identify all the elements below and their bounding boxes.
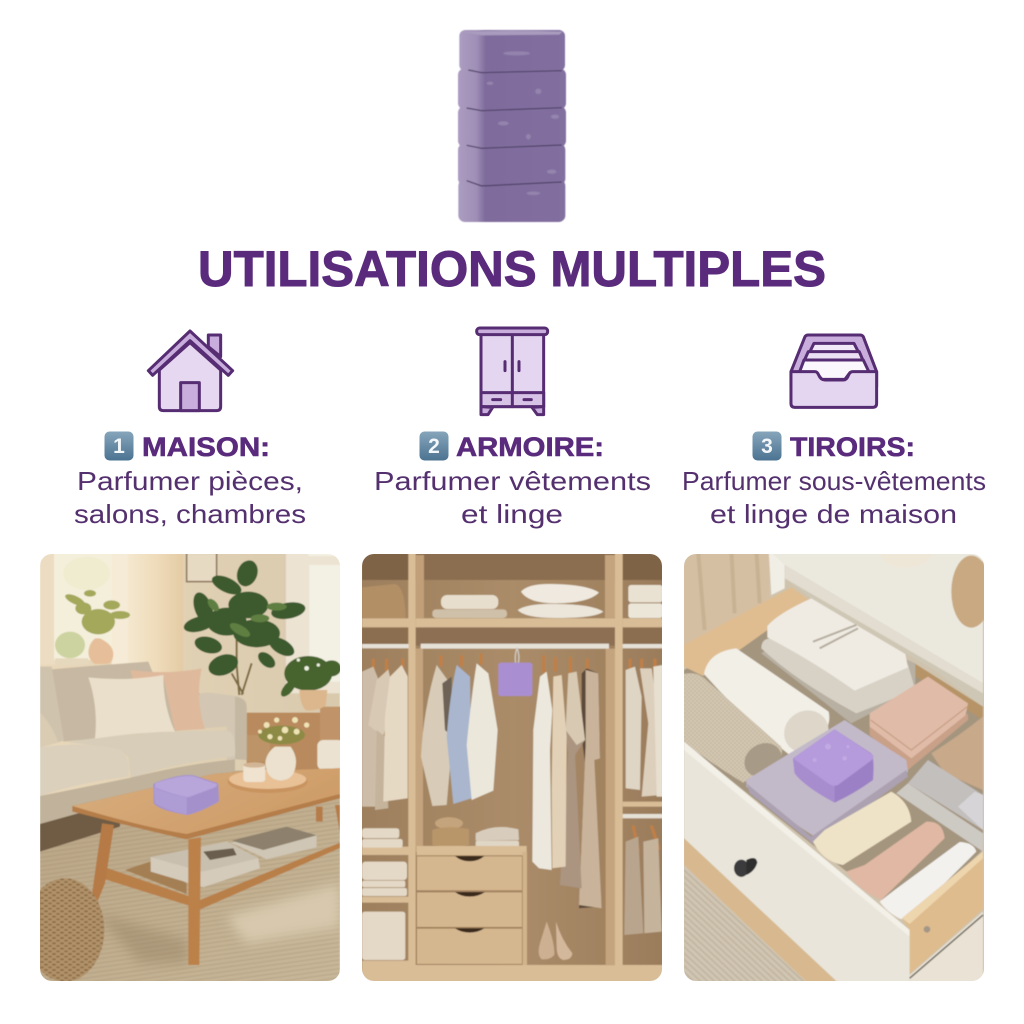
tray	[228, 780, 308, 793]
text: maison description: Parfumer pièces,	[77, 466, 303, 496]
heading: tiroirs: TIROIRS:	[790, 432, 915, 462]
soap stack	[458, 30, 566, 222]
panel: living room photo	[26, 550, 344, 983]
vase with flowers	[258, 726, 305, 744]
heading: armoire: ARMOIRE:	[456, 432, 604, 462]
text: maison description	[74, 466, 306, 529]
icon: drawer tray	[791, 335, 877, 407]
books	[230, 835, 317, 860]
side table and small plant	[247, 713, 327, 771]
panel: wardrobe photo	[355, 550, 672, 983]
pouf	[40, 878, 105, 981]
text: armoire description: et linge	[461, 499, 563, 529]
badge: 1: 1	[113, 435, 125, 458]
frames	[362, 550, 663, 983]
bowl and knit ball	[878, 550, 933, 568]
tabletop	[72, 768, 340, 839]
shelf	[125, 862, 187, 894]
badge: 3: 3	[761, 435, 773, 458]
icon: wardrobe	[477, 328, 548, 415]
rug	[684, 865, 808, 983]
column: maison	[74, 331, 306, 529]
heading: maison: MAISON:	[142, 432, 270, 462]
badge: 2: 2	[428, 435, 440, 458]
dresser side top	[769, 550, 785, 595]
legs	[91, 823, 114, 906]
rolled underwear	[813, 792, 911, 865]
drawer front	[684, 742, 910, 983]
title: UTILISATIONS MULTIPLES	[198, 241, 826, 297]
pink folded clothes	[870, 677, 968, 767]
curtain	[684, 554, 770, 644]
text: armoire description: Parfumer vêtements	[374, 466, 651, 496]
ottoman	[316, 739, 340, 770]
lower center items	[435, 817, 463, 829]
rug	[40, 770, 340, 983]
folded towels	[761, 617, 915, 723]
knob	[734, 860, 749, 877]
badge: 3	[752, 432, 782, 460]
panel: drawer photo	[678, 550, 995, 983]
sill vase and sprigs	[64, 590, 130, 634]
icon: house	[148, 331, 233, 411]
sofa	[52, 662, 203, 742]
top compartment shades	[416, 554, 615, 580]
cup	[243, 763, 265, 782]
text: armoire description	[374, 466, 651, 529]
text: tiroirs description: et linge de maison	[710, 499, 957, 529]
center shirts	[421, 665, 450, 806]
text: maison description: salons, chambres	[74, 499, 306, 529]
left clothes	[362, 667, 380, 807]
dresses	[578, 668, 597, 909]
drawer interior	[684, 600, 983, 920]
drawer wood right	[902, 852, 983, 974]
badge: 2	[420, 432, 448, 460]
right clothes	[626, 667, 642, 790]
rails	[362, 644, 663, 818]
wood below	[684, 838, 839, 983]
back right table legs	[316, 807, 323, 822]
text: tiroirs description	[682, 466, 986, 529]
picture	[187, 553, 217, 582]
lavender cloth under soap	[746, 720, 908, 837]
drawers unit	[417, 846, 527, 855]
top shelf items	[441, 595, 498, 609]
rolled towels	[704, 648, 829, 755]
gray and knit right items	[931, 717, 983, 790]
shoes	[539, 922, 554, 959]
hangers	[373, 655, 659, 850]
soap	[793, 729, 874, 803]
soap on table	[154, 776, 217, 815]
column: tiroirs	[682, 335, 986, 529]
floor plant	[230, 639, 253, 696]
column: armoire	[374, 328, 651, 529]
left lower items	[362, 828, 407, 960]
badge: 1	[104, 432, 134, 460]
hanging soap	[515, 648, 519, 663]
text: tiroirs description: Parfumer sous-vêtements	[682, 466, 986, 496]
right window	[286, 550, 343, 693]
window left	[40, 550, 55, 665]
pillows	[131, 668, 205, 731]
